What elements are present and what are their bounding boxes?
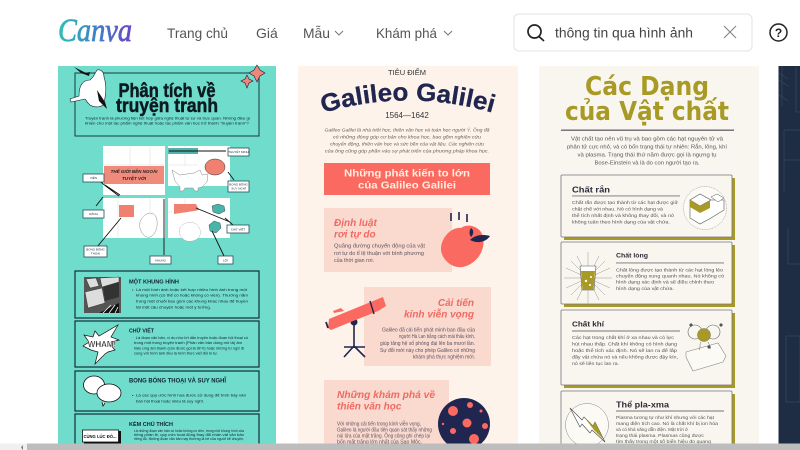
icon: wham burst: WHAM! [88, 340, 116, 349]
body text: và có khả năng dẫn điện. Mặt trời ở [616, 426, 688, 433]
title: của Vật chất [565, 96, 729, 127]
labels: KHUNG [155, 258, 167, 262]
caption box: cùng lúc đó: CÙNG LÚC ĐÓ... [83, 434, 117, 439]
icon: help [770, 24, 787, 41]
card: thể pla-xma [561, 391, 735, 450]
body text [134, 335, 248, 356]
row: bong bóng thoại và suy nghĩ [75, 371, 259, 411]
icon: lightning bolt [566, 404, 608, 446]
body text: Galileo đã cải tiến phát minh ban đầu của [382, 326, 475, 334]
body text [572, 199, 679, 226]
body text: hình dạng của vật chứa. [616, 285, 674, 292]
body text: hoặc thể tích xác định. Nó sẽ lan ra để lấp [572, 347, 677, 354]
body text: chặt chẽ với nhau. Nó có hình dạng và [572, 206, 663, 212]
icon: telescope [326, 297, 386, 357]
card: cải tiến kính viễn vọng [326, 287, 491, 366]
body text: chuyển động xung quanh nhau. Nó không có [616, 272, 724, 280]
dates: 1564—1642 [385, 111, 429, 120]
row: kèm chú thích [75, 414, 259, 450]
comic page diagram [83, 146, 249, 264]
body text: rơi tự do tỉ lệ thuận với bình phương [334, 250, 424, 257]
body text: Là những đoạn văn bản có hoặc không có viền, trong một khung hình của [134, 429, 244, 433]
body text: nó sẽ liên tục lan ra. [572, 361, 619, 367]
title [565, 72, 729, 127]
icon: building blocks [684, 186, 726, 230]
icon: falling apple [441, 212, 490, 267]
labels: CHỮ VIẾT [231, 226, 245, 232]
logo: Canva: Canva [58, 13, 132, 49]
body text: • [132, 287, 134, 292]
nav link: Trang chủ: Trang chủ [167, 25, 228, 41]
title: truyện tranh [116, 95, 218, 117]
header navigation bar [58, 13, 787, 51]
search query text: thông tin qua hình ảnh [555, 24, 693, 40]
labels: BONG BÓNG [229, 182, 248, 186]
body text: tải một câu chuyện hoặc một ý tưởng. [136, 304, 211, 310]
body text: thể tích nhất định và không thay đổi, và nó [572, 212, 674, 219]
nav link: Mẫu with chevron [303, 25, 343, 41]
heading [404, 297, 474, 320]
body text: Quãng đường chuyển động của vật [334, 242, 426, 250]
labels [83, 148, 249, 264]
heading: Cải tiến [438, 297, 474, 309]
body text: riêng phần lề, quy ước hoạt động thay đổi nhân vật văn bản [134, 433, 244, 437]
body text: Plasma tương tự như khí nhưng với các hạt [616, 415, 715, 421]
icon: help: ? [775, 26, 782, 40]
intro text [567, 136, 727, 166]
body text [616, 266, 724, 292]
body text: trong một chuỗi bao gồm các khung khác nhau để truyền [136, 298, 248, 304]
intro text: chuyển động, thiên văn học và sức bền của vật liệu. Các nghiên cứu [330, 140, 484, 146]
illustration: cats and speech bubbles [119, 159, 225, 241]
icon: wham burst [83, 325, 119, 364]
icon: gas balloons [686, 323, 726, 371]
caption: thế giới bên ngoài: TUYỆT VỜI [122, 174, 147, 181]
intro text: của ông cũng góp phần vào sự phát triển của phương pháp khoa học. [325, 148, 489, 154]
body text [572, 334, 678, 367]
body text: mang điện tích cao. Nó là chất khí bị ion hóa [616, 421, 718, 427]
body text: tìm thấy trong một số biển hiệu đo quang [616, 438, 711, 445]
body text [337, 420, 432, 446]
intro text [85, 116, 250, 126]
caption box: cùng lúc đó [82, 430, 121, 444]
heading: KÈM CHÚ THÍCH [129, 420, 173, 428]
body text: Sự đổi mới này cho phép Galileo có những [380, 347, 475, 354]
body text [132, 392, 246, 404]
row: một khung hình [75, 271, 259, 318]
title [116, 80, 218, 117]
icon: magnifier [528, 25, 544, 41]
heading: Thể pla-xma [616, 400, 670, 410]
heading: Định luật [334, 218, 377, 229]
body text: Chất lỏng được tạo thành từ các hạt lỏng lẻo [616, 266, 723, 274]
kicker: TIÊU ĐIỂM [388, 68, 426, 77]
body text: riêng độ. Những đoạn văn bản này thường là lời của người kể chuyện. [134, 437, 244, 441]
icon: speech clouds [84, 376, 121, 406]
heading: Chất rắn [572, 186, 610, 194]
nav link: Mẫu with chevron: Mẫu [303, 25, 330, 41]
body text [380, 326, 475, 360]
intro text: Bose-Einstein và là do con người tạo ra. [594, 160, 700, 166]
card: những khám phá về thiên văn học [324, 380, 490, 450]
body text: Là đoạn văn bản, ví dụ như lời dẫn truyện hoặc đoạn hội thoại có [136, 335, 248, 340]
banner [324, 163, 490, 195]
banner: Những phát kiến to lớn [344, 168, 470, 180]
caption: thế giới bên ngoài: THẾ GIỚI BÊN NGOÀI [111, 167, 158, 174]
banner: của Galileo Galilei [358, 180, 456, 192]
body text [132, 287, 249, 310]
card: định luật rơi tự do [324, 208, 490, 272]
scrollbar strip [0, 444, 800, 450]
search box [514, 14, 752, 51]
heading: CHỮ VIẾT [129, 328, 154, 334]
body text [134, 429, 244, 441]
intro text: phân tử cực nhỏ, và có bốn trạng thái tự nhiên: Rắn, lỏng, khí [567, 144, 727, 150]
body text: Các hạt trong chất khí ở xa nhau và có lực [572, 334, 675, 341]
heading: thiên văn học [337, 402, 402, 412]
body text: Chất rắn được tạo thành từ các hạt được giữ [572, 199, 679, 206]
card: chất khí [561, 310, 735, 388]
labels: BONG BÓNG [86, 246, 105, 252]
body text: bản hội thoại hoặc miêu tả suy nghĩ. [136, 398, 204, 404]
body text: trong một trong truyện tranh (Phần văn bản dùng mô tả) âm [134, 341, 242, 345]
body text: Galileo là người đầu tiên quan sát thấy những [337, 428, 432, 434]
nav link: Khám phá with chevron: Khám phá [376, 25, 437, 41]
heading: BONG BÓNG THOẠI VÀ SUY NGHĨ [129, 376, 226, 384]
icon: planet [438, 398, 490, 450]
arrows [96, 151, 234, 256]
panel: dark infographic, cropped [778, 66, 800, 446]
panel: states of matter infographic [539, 66, 759, 450]
caption: thế giới bên ngoài [104, 166, 164, 184]
icon: sparkles [241, 65, 265, 88]
panel: comics analysis infographic [58, 65, 276, 450]
labels: VIỀN [90, 175, 97, 180]
illustration: reading figure [70, 67, 107, 109]
body text: hút nhau thấp. Chất khí không có hình dạng [572, 342, 677, 348]
labels: LỜI [223, 258, 228, 262]
body text: Với những cải tiến trong kính viễn vọng, [337, 420, 421, 428]
body text: khám phá thực nghiệm mới. [413, 354, 475, 360]
title: curved: Galileo Galilei [321, 83, 496, 112]
body text: Là một hình ảnh hoặc kết hợp nhiều hình ảnh trong một [136, 287, 248, 292]
body text: giúp tăng hệ số phóng đại lên ba mươi lần. [380, 341, 475, 347]
intro text: có những đóng góp cơ bản cho khoa học, bao gồm nghiên cứu [333, 134, 482, 140]
intro text [324, 126, 490, 154]
title: Các Dạng [585, 72, 709, 102]
title box [70, 65, 265, 136]
heading: Chất khí [572, 320, 605, 328]
labels: THOẠI [91, 252, 100, 256]
card: chất rắn [561, 175, 735, 240]
title: Phân tích về [118, 80, 216, 102]
nav link: Giá: Giá [256, 25, 278, 41]
icon: fizzy glass [564, 252, 612, 304]
body text: không tuân theo hình dạng của vật chứa. [572, 218, 670, 226]
body text: hiệu ứng âm thanh (còn được gọi là SFX) hoặc những từ ngữ đi [134, 346, 244, 350]
icon: comic frames [84, 277, 121, 313]
labels: RÃNH [89, 211, 98, 216]
card: chất lỏng [561, 242, 735, 307]
heading: rơi tự do [334, 230, 376, 240]
body text: Là các quy ước hình họa được sử dụng để trình bày văn [136, 392, 246, 398]
intro text: khiến cho một tác phẩm nghệ thuật hoặc tác phẩm văn học trở thành "truyện tranh"? [85, 122, 249, 126]
row: chữ viết [75, 321, 259, 367]
body text: • [132, 392, 134, 398]
body text: đầy vật chứa nó và nếu không được đậy kín, [572, 354, 678, 360]
body text: trạng thái plasma. Plasmas cũng được [616, 433, 705, 439]
body text [334, 242, 426, 264]
body text: của thời gian rơi. [334, 257, 374, 264]
intro text: và plasma. Trạng thái thứ năm được gọi là ngưng tụ [578, 152, 716, 158]
intro text: Truyện tranh là phương tiện kết hợp giữa nghệ thuật tự sự và trực quan. Những điều gì [85, 116, 250, 120]
body text: núi lửa của mặt trăng. Ông cũng ghi chép lại [337, 432, 430, 440]
body text: khung hình (có thể có hoặc không có viền). Thường nằm [136, 292, 249, 298]
heading: MỘT KHUNG HÌNH [129, 278, 179, 286]
heading: kính viễn vọng [404, 308, 474, 320]
icon: clear [724, 26, 736, 38]
labels: SUY NGHĨ [231, 186, 246, 190]
heading: Chất lỏng [616, 252, 648, 260]
intro text: Galileo Galilei là nhà triết học, thiên văn học và toán học người Ý. Ông đã [324, 126, 490, 132]
labels: THUYẾT MINH [228, 149, 249, 154]
heading [334, 218, 377, 240]
body text: cùng với hình ảnh đều là hình thức viết đối kí tự. [134, 352, 218, 356]
body text [616, 415, 718, 445]
body text: người Hà Lan bằng cách mài thấu kính, [399, 333, 475, 340]
panel: Galileo Galilei infographic [298, 66, 518, 446]
heading: Những khám phá về [337, 389, 435, 401]
intro text: Vật chất tạo nên vũ trụ và bao gồm các hạt nguyên tử và [571, 136, 724, 142]
body text: hình dạng xác định và sẽ điều chỉnh theo [616, 278, 714, 286]
body text: bốn mặt trăng lớn nhất của Sao Mộc. [337, 438, 422, 446]
heading [337, 389, 435, 412]
